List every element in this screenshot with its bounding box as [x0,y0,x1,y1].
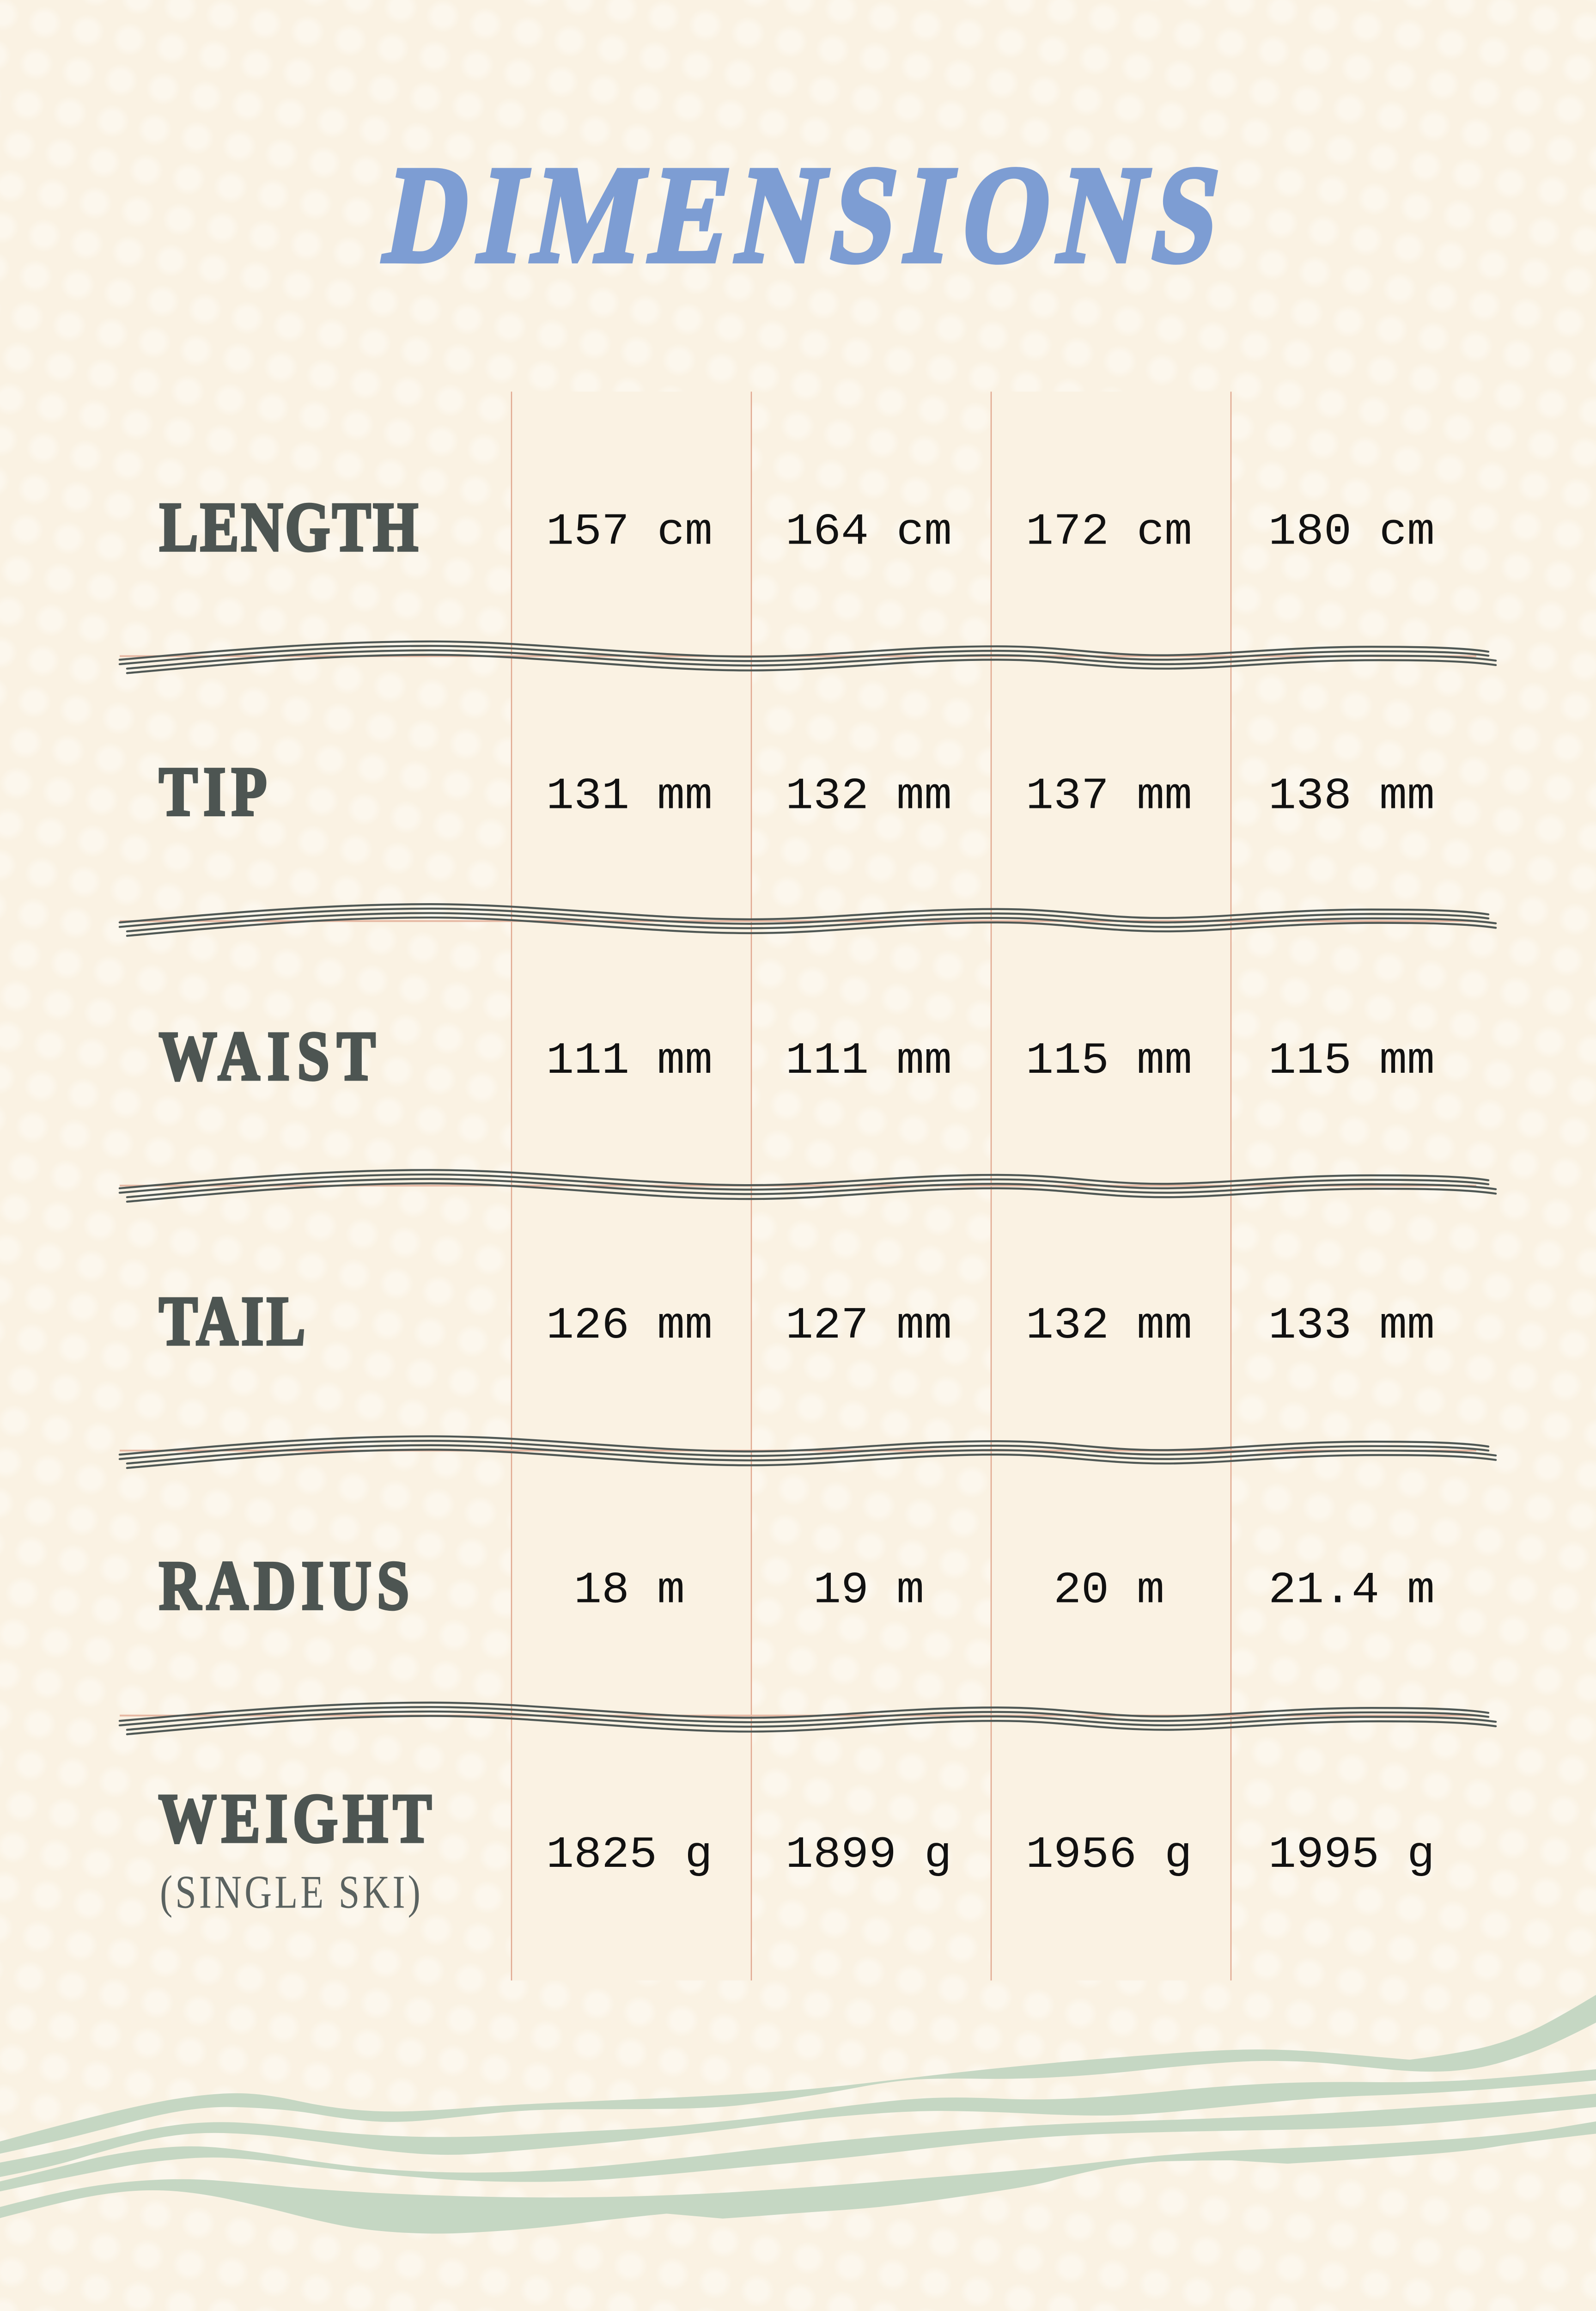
label: weight: WEIGHT [158,1780,432,1858]
value 1995 g: 1995 g [1268,1829,1435,1880]
row: tip [159,753,1435,831]
green snow waves at bottom [0,1995,1596,2234]
separator 3 [120,1170,1496,1202]
value 132 mm: 132 mm [1026,1301,1192,1351]
label: waist: WAIST [159,1018,376,1095]
label: tip: TIP [159,753,267,831]
value 1825 g: 1825 g [546,1829,713,1880]
value 1899 g: 1899 g [786,1829,952,1880]
value 137 mm: 137 mm [1026,771,1192,822]
title: DIMENSIONS [375,138,1232,291]
value 18 m: 18 m [574,1565,685,1616]
value 180 cm: 180 cm [1268,507,1435,557]
separator 4 [120,1437,1496,1468]
separator 5 [120,1703,1496,1734]
value 132 mm: 132 mm [786,771,952,822]
value 126 mm: 126 mm [546,1301,713,1351]
wave band 4 [0,2121,1596,2234]
row: radius [159,1547,1435,1625]
value 127 mm: 127 mm [786,1301,952,1351]
table panel [120,391,1496,1981]
label: radius: RADIUS [159,1547,409,1625]
value 138 mm: 138 mm [1268,771,1435,822]
row separators [120,642,1496,1734]
separator 2 [120,904,1496,936]
value 157 cm: 157 cm [546,507,713,557]
value 164 cm: 164 cm [786,507,952,557]
value 21.4 m: 21.4 m [1268,1565,1435,1616]
value 133 mm: 133 mm [1268,1301,1435,1351]
value 115 mm second: 115 mm [1268,1035,1435,1086]
value 131 mm: 131 mm [546,771,713,822]
value 172 cm: 172 cm [1026,507,1192,557]
row: weight [158,1780,1435,1918]
wave band 3 [0,2094,1596,2191]
column background: third size [991,391,1231,1981]
wave band 2 [0,2069,1596,2177]
row: length [159,489,1435,566]
value 111 mm: 111 mm [546,1035,713,1086]
wave band 1 [0,1995,1596,2154]
value 19 m: 19 m [813,1565,924,1616]
value 115 mm: 115 mm [1026,1035,1192,1086]
value 20 m: 20 m [1054,1565,1164,1616]
label: tail: TAIL [159,1283,305,1360]
label: length: LENGTH [159,489,418,566]
row: tail [159,1283,1435,1360]
value 1956 g: 1956 g [1026,1829,1192,1880]
row: waist [159,1018,1435,1095]
column background: first size [512,391,751,1981]
separator 1 [120,642,1496,673]
value 111 mm second: 111 mm [786,1035,952,1086]
sublabel: single ski: (SINGLE SKI) [160,1866,420,1918]
column divider lines [512,391,1231,1981]
